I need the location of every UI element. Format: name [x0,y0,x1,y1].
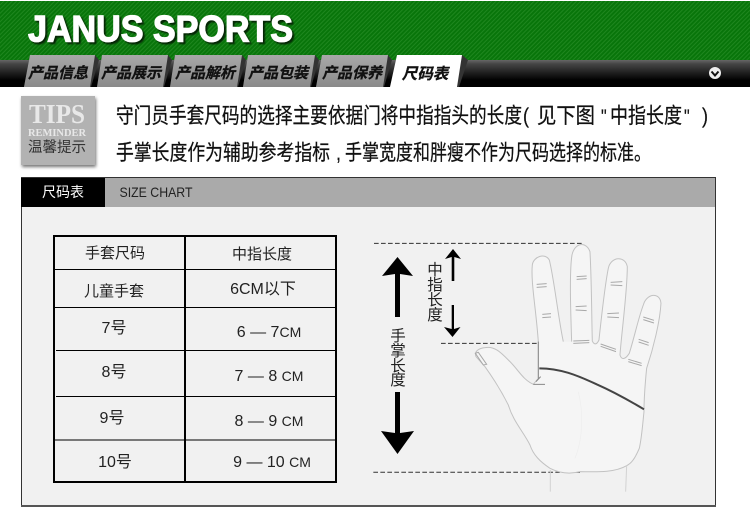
label: finger length: 长 [427,291,443,309]
brand title: JANUS SPORTS [28,8,293,50]
arrow: palm length up [382,257,413,317]
intro line 1: " [601,106,607,127]
label: finger length: 度 [427,306,443,324]
header label: SIZE CHART [120,184,193,200]
table text: 7 — 8 CM [235,368,303,385]
table text: 8号 [102,363,126,381]
tab: product analysis: 产品解析 [175,65,237,82]
green banner [0,1,750,61]
size table [54,236,336,482]
finger creases [537,276,654,366]
table text [84,245,311,471]
tab: product analysis [170,55,246,87]
tips badge: 温馨提示 [28,139,86,156]
tab: product care [316,55,392,87]
tab: product info [24,55,99,87]
panel: size chart: 尺码表 [42,184,84,200]
intro line 1: ( [523,105,529,128]
table text: 6CM以下 [230,281,296,298]
tips badge: REMINDER [28,128,87,139]
wrist lines [550,466,627,492]
icon: dropdown chevron [709,67,721,79]
arrow: finger length down [444,305,460,337]
tab: product info: 产品信息 [28,65,89,82]
intro line 1: 中指长度 [610,105,682,128]
label: palm length: 长 [390,357,406,375]
intro text [116,105,708,165]
intro line 2: 手掌宽度和胖瘦不作为尺码选择的标准。 [345,142,651,165]
intro line 2: 手掌长度作为辅助参考指标 [116,142,330,165]
table text: 8 — 9 CM [235,413,303,430]
table text: 中指长度 [232,246,292,263]
tab: product packaging: 产品包装 [248,65,310,82]
tab: size chart active [390,55,468,87]
tab: size chart active: 尺码表 [402,65,451,83]
intro line 2: , [336,142,341,165]
intro line 1: " [684,106,690,127]
label: palm length: 手 [390,327,406,345]
table text: 儿童手套 [84,282,144,300]
tips badge [21,96,95,165]
label: palm length: 度 [390,371,406,389]
intro line 1: ) [702,105,708,128]
palm lines [533,342,545,384]
panel: size chart [21,178,716,507]
intro line 1 [116,105,708,128]
table text: 9 — 10 CM [233,454,311,471]
label: finger length: 中 [427,261,443,279]
intro line 1: 见下图 [537,105,595,128]
panel header bar [22,178,715,207]
tab: product care: 产品保养 [322,65,384,82]
intro line 1: 守门员手套尺码的选择主要依据门将中指指头的长度 [116,105,522,128]
black navigation bar [0,60,750,87]
table text: 手套尺码 [85,245,145,262]
header tab [21,178,105,207]
hand outline [475,245,661,473]
arrow: palm length down [381,392,414,454]
table text: 10号 [98,453,132,471]
label: finger length: 指 [427,276,443,294]
thumb nail [475,352,487,365]
tab: product showcase [97,55,172,87]
navigation tabs [24,55,468,87]
intro line 2 [116,142,651,165]
tips badge: TIPS [29,99,85,129]
tab: product showcase: 产品展示 [101,65,163,82]
table text: 7号 [102,319,126,337]
tab: product packaging [243,55,319,87]
arrow: finger length up [445,249,461,281]
hand fill [475,245,661,473]
label: palm length: 掌 [390,342,406,360]
dashed guide lines [373,243,590,472]
hand diagram [373,243,661,492]
table text: 6 — 7CM [237,324,301,341]
table text: 9号 [100,409,124,427]
